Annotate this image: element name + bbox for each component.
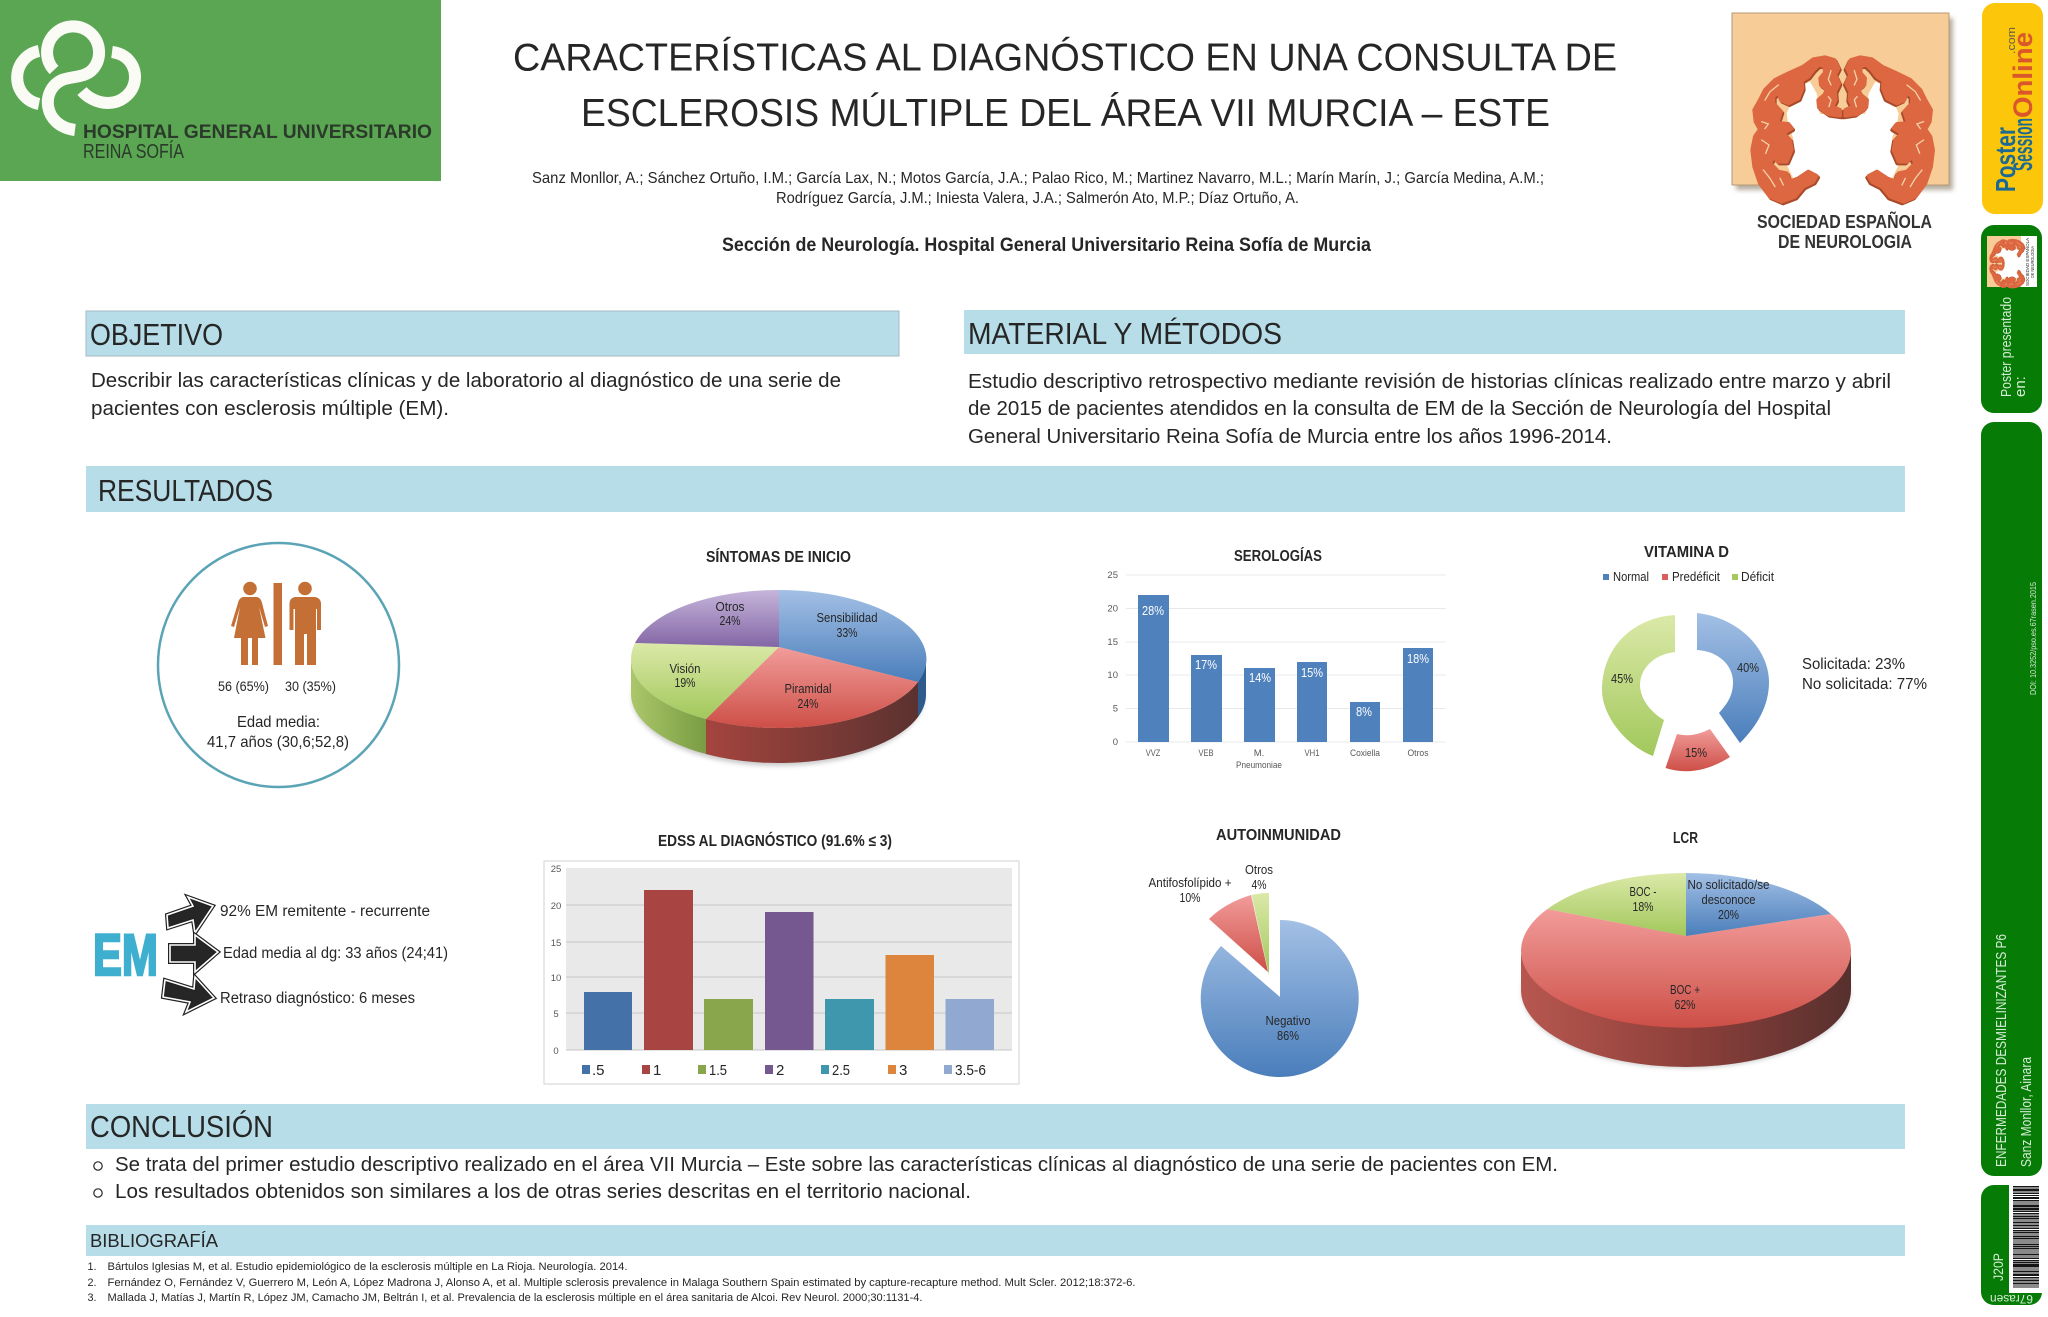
authors: Sanz Monllor, A.; Sánchez Ortuño, I.M.; García Lax, N.; Motos García, J.A.; Palao Rico, M.; Martinez Navarro, M.L.; Marín Marín, J.; García Medina, A.M.; bbox=[532, 170, 1544, 187]
presented label: Poster presentado bbox=[1998, 297, 2015, 397]
bullet 2 bbox=[94, 1189, 102, 1197]
panel: objetivo: pacientes con esclerosis múltiple (EM). bbox=[91, 397, 449, 420]
bar value labels: 8% bbox=[1356, 704, 1372, 719]
slice: piramidal bbox=[706, 647, 918, 728]
bullet 1 bbox=[94, 1162, 102, 1170]
authors: Rodríguez García, J.M.; Iniesta Valera, J.A.; Salmerón Ato, M.P.; Díaz Ortuño, A. bbox=[776, 190, 1299, 207]
panel: resultados heading bbox=[86, 466, 1905, 512]
affiliation: Sección de Neurología. Hospital General Universitario Reina Sofía de Murcia bbox=[722, 235, 1371, 256]
slice labels: 15% bbox=[1685, 745, 1707, 760]
side tab: presented at bbox=[1981, 225, 2042, 413]
panel: demographics circle: 41,7 años (30,6;52,8) bbox=[207, 734, 349, 751]
y axis labels: 5 bbox=[1113, 704, 1118, 714]
requested share: Solicitada: 23% bbox=[1802, 656, 1905, 673]
y axis labels: 10 bbox=[1107, 670, 1118, 681]
statement 3: Retraso diagnóstico: 6 meses bbox=[220, 990, 415, 1007]
slice: otros bbox=[635, 590, 779, 647]
slice labels: desconoce bbox=[1702, 892, 1756, 907]
legend bbox=[1603, 569, 1774, 584]
panel: bibliografia: Fernández O, Fernández V, Guerrero M, León A, López Madrona J, Alonso A, et al. Multiple sclerosis prevalence in Malaga Southern Spain estimated by capture-recapture method. Mult Scler. 2012;18:372-6. bbox=[108, 1277, 1136, 1289]
arrow: remitente bbox=[167, 897, 213, 933]
slice labels: Otros bbox=[716, 599, 745, 614]
chart: sintomas de inicio bbox=[631, 549, 926, 766]
icon: EM lettering: EM bbox=[93, 923, 158, 988]
arrow: retraso bbox=[163, 977, 214, 1012]
men count: 30 (35%) bbox=[285, 678, 336, 694]
side tab: barcode bbox=[1981, 1185, 2042, 1306]
y axis labels: 0 bbox=[553, 1046, 559, 1057]
reference 2: 2. bbox=[88, 1277, 97, 1289]
y axis labels: 15 bbox=[551, 938, 561, 949]
chart title: SÍNTOMAS DE INICIO bbox=[706, 549, 851, 566]
panel: objetivo bbox=[86, 311, 899, 420]
slice: normal bbox=[1697, 613, 1769, 743]
slice: sensibilidad bbox=[779, 590, 926, 682]
slice labels bbox=[1611, 660, 1759, 760]
slice labels: 19% bbox=[674, 675, 696, 690]
bar value labels: 14% bbox=[1249, 670, 1271, 685]
x axis labels: Coxiella bbox=[1350, 748, 1381, 759]
y axis labels: 25 bbox=[551, 864, 561, 875]
x axis labels: VVZ bbox=[1146, 748, 1160, 759]
mean age: Edad media: bbox=[237, 714, 320, 731]
y axis labels bbox=[1107, 570, 1118, 748]
slice labels: Negativo bbox=[1266, 1013, 1310, 1028]
chart: vitamina d: No solicitada: 77% bbox=[1802, 676, 1927, 693]
chart title: AUTOINMUNIDAD bbox=[1216, 827, 1341, 844]
small society logo: DE NEUROLOGIA bbox=[2030, 245, 2035, 278]
small society logo: SOCIEDAD ESPAÑOLA bbox=[2024, 237, 2030, 286]
icon: divider bbox=[274, 583, 282, 665]
panel: bibliografia: Bártulos Iglesias M, et al. Estudio epidemiológico de la esclerosis múltiple en La Rioja. Neurología. 2014. bbox=[108, 1261, 628, 1273]
legend: 1 bbox=[653, 1062, 661, 1079]
conclusion 2: Los resultados obtenidos son similares a los de otras series descritas en el territorio nacional. bbox=[115, 1180, 971, 1203]
authors bbox=[532, 170, 1544, 207]
slice: antifosfolipido bbox=[1209, 895, 1268, 972]
panel: resultados heading: RESULTADOS bbox=[98, 473, 273, 508]
x axis labels bbox=[1146, 748, 1429, 771]
slice labels: BOC + bbox=[1670, 982, 1700, 997]
panel: bibliografia: Mallada J, Matías J, Martín R, López JM, Camacho JM, Beltrán I, et al. Prevalencia de la esclerosis múltiple en el área sanitaria de Alcoi. Rev Neurol. 2000;30:1131-4. bbox=[108, 1292, 922, 1304]
bar value labels: 18% bbox=[1407, 651, 1429, 666]
legend: 3 bbox=[899, 1062, 907, 1079]
slice: predeficit bbox=[1666, 729, 1730, 771]
doi: DOI: 10.3252/pso.es.67rasen.2015 bbox=[2028, 582, 2038, 695]
society name: SOCIEDAD ESPAÑOLA bbox=[1757, 211, 1932, 232]
slice labels: Sensibilidad bbox=[816, 610, 878, 625]
slice labels bbox=[1630, 877, 1770, 1012]
pie side bbox=[1521, 950, 1851, 1067]
statement 1: 92% EM remitente - recurrente bbox=[220, 903, 430, 920]
text block: Estudio descriptivo retrospectivo mediante revisión de historias clínicas realizado entre marzo y abril bbox=[968, 370, 1891, 393]
text block: Describir las características clínicas y de laboratorio al diagnóstico de una serie de bbox=[91, 369, 841, 392]
chart: serologias bbox=[1107, 548, 1446, 771]
slice: vision bbox=[631, 643, 779, 719]
society logo bbox=[1732, 13, 1953, 252]
slice labels: 18% bbox=[1632, 899, 1654, 914]
x axis labels: VEB bbox=[1198, 748, 1214, 759]
brand word Session: Session bbox=[2008, 118, 2038, 171]
y axis labels: 15 bbox=[1107, 637, 1118, 648]
legend: .5 bbox=[592, 1062, 605, 1079]
code: J20P bbox=[1990, 1253, 2006, 1281]
slice: boc positivo bbox=[1521, 909, 1851, 1028]
legend: 2.5 bbox=[832, 1062, 850, 1079]
reversed code: 67rasen bbox=[1990, 1292, 2033, 1306]
chart: vitamina d bbox=[1602, 544, 1927, 771]
chart title: SEROLOGÍAS bbox=[1234, 548, 1322, 565]
y axis labels: 5 bbox=[553, 1009, 559, 1020]
statement 2: Edad media al dg: 33 años (24;41) bbox=[223, 945, 448, 962]
panel: demographics circle bbox=[158, 543, 399, 787]
legend: 3.5-6 bbox=[955, 1062, 986, 1079]
icon: hospital interlaced rings bbox=[17, 26, 135, 130]
slice labels: Visión bbox=[670, 661, 700, 676]
slice: negativo bbox=[1201, 920, 1359, 1077]
y axis labels: 20 bbox=[1107, 604, 1118, 614]
x axis labels: Pneumoniae bbox=[1236, 760, 1282, 771]
legend: 1.5 bbox=[709, 1062, 727, 1079]
arrow: edad bbox=[170, 935, 218, 972]
chart title: VITAMINA D bbox=[1644, 544, 1729, 561]
title: CARACTERÍSTICAS AL DIAGNÓSTICO EN UNA CONSULTA DE bbox=[513, 36, 1617, 80]
slice labels: 40% bbox=[1737, 660, 1759, 675]
slice labels: BOC - bbox=[1630, 884, 1656, 899]
hospital name: HOSPITAL GENERAL UNIVERSITARIO bbox=[83, 122, 432, 143]
chart title: LCR bbox=[1673, 830, 1698, 847]
y axis labels: 0 bbox=[1113, 737, 1118, 748]
panel: em summary bbox=[93, 897, 448, 1012]
x axis labels: M. bbox=[1254, 748, 1264, 759]
icon: brain bbox=[1752, 57, 1933, 210]
slice labels: Antifosfolípido + bbox=[1148, 875, 1232, 890]
slice: deficit bbox=[1602, 615, 1675, 756]
conclusion 1: Se trata del primer estudio descriptivo realizado en el área VII Murcia – Este sobre las características clínicas al diagnóstico de una serie de pacientes con EM. bbox=[115, 1153, 1558, 1176]
panel: material y metodos bbox=[964, 310, 1905, 448]
x axis labels: Otros bbox=[1408, 748, 1429, 759]
slice labels bbox=[670, 599, 878, 711]
legend: Predéficit bbox=[1672, 569, 1720, 584]
slice labels: 62% bbox=[1674, 997, 1696, 1012]
chart title: EDSS AL DIAGNÓSTICO (91.6% ≤ 3) bbox=[658, 832, 892, 850]
x axis labels: VH1 bbox=[1304, 748, 1320, 759]
pie sides bbox=[918, 659, 926, 717]
chart: edss al diagnostico bbox=[544, 832, 1019, 1084]
brand word Online: Online bbox=[2008, 32, 2038, 118]
society logo: DE NEUROLOGIA bbox=[1778, 232, 1912, 252]
women count: 56 (65%) bbox=[218, 678, 269, 694]
session name: ENFERMEDADES DESMIELINIZANTES P6 bbox=[1993, 934, 2010, 1167]
brand word Poster: Poster bbox=[1990, 127, 2021, 192]
slice labels: 33% bbox=[836, 625, 858, 640]
title bbox=[513, 36, 1617, 135]
brand suffix: .com bbox=[2006, 27, 2018, 54]
bar value labels: 15% bbox=[1301, 665, 1323, 680]
barcode bbox=[2013, 1186, 2039, 1288]
side tab: presented at: en: bbox=[2012, 376, 2029, 397]
y axis labels: 20 bbox=[551, 901, 561, 912]
bar value labels bbox=[1142, 603, 1429, 719]
side tab: session bbox=[1981, 422, 2042, 1176]
legend: Normal bbox=[1613, 569, 1649, 584]
legend: 2 bbox=[776, 1062, 784, 1079]
side tab: Poster Session Online bbox=[1982, 3, 2043, 214]
panel: material y metodos: General Universitario Reina Sofía de Murcia entre los años 1996-2014. bbox=[968, 425, 1612, 448]
slice labels: No solicitado/se bbox=[1688, 877, 1770, 892]
y axis labels bbox=[551, 864, 561, 1057]
reference 1: 1. bbox=[88, 1261, 97, 1273]
slice labels: 45% bbox=[1611, 671, 1633, 686]
slice labels: 86% bbox=[1277, 1028, 1299, 1043]
chart: lcr bbox=[1521, 830, 1851, 1068]
legend bbox=[582, 1062, 986, 1079]
icon: woman bbox=[231, 582, 268, 665]
slice labels: 4% bbox=[1252, 877, 1267, 892]
panel: conclusion bbox=[86, 1104, 1905, 1203]
heading: BIBLIOGRAFÍA bbox=[90, 1231, 218, 1251]
y axis labels: 25 bbox=[1107, 570, 1118, 581]
chart: autoinmunidad bbox=[1148, 827, 1359, 1077]
y axis labels: 10 bbox=[551, 973, 561, 984]
bars bbox=[584, 890, 994, 1050]
small society logo bbox=[1987, 236, 2037, 288]
slice labels: Otros bbox=[1245, 862, 1273, 877]
slice: otros bbox=[1252, 893, 1269, 975]
bars bbox=[1138, 595, 1433, 742]
author name: Sanz Monllor, Ainara bbox=[2018, 1056, 2035, 1167]
slice: no solicitado bbox=[1686, 873, 1831, 936]
slice labels: 24% bbox=[720, 613, 741, 628]
slice labels: 24% bbox=[798, 696, 819, 711]
heading: MATERIAL Y MÉTODOS bbox=[968, 316, 1282, 351]
slice labels: 20% bbox=[1718, 907, 1739, 922]
slice labels bbox=[1148, 862, 1310, 1043]
bar value labels: 17% bbox=[1195, 657, 1217, 672]
slice labels: 10% bbox=[1180, 890, 1201, 905]
title: ESCLEROSIS MÚLTIPLE DEL ÁREA VII MURCIA – ESTE bbox=[581, 92, 1550, 135]
slice: boc negativo bbox=[1548, 873, 1686, 936]
bar value labels: 28% bbox=[1142, 603, 1164, 618]
hospital logo panel bbox=[0, 0, 441, 181]
icon: man bbox=[290, 582, 321, 665]
heading: OBJETIVO bbox=[90, 317, 223, 352]
legend: Déficit bbox=[1741, 569, 1774, 584]
heading: CONCLUSIÓN bbox=[90, 1109, 273, 1144]
panel: bibliografia bbox=[86, 1225, 1905, 1304]
reference 3: 3. bbox=[88, 1292, 97, 1304]
panel: material y metodos: de 2015 de pacientes atendidos en la consulta de EM de la Sección de Neurología del Hospital bbox=[968, 397, 1831, 420]
slice labels: Piramidal bbox=[784, 681, 832, 696]
hospital subname: REINA SOFÍA bbox=[83, 140, 185, 163]
